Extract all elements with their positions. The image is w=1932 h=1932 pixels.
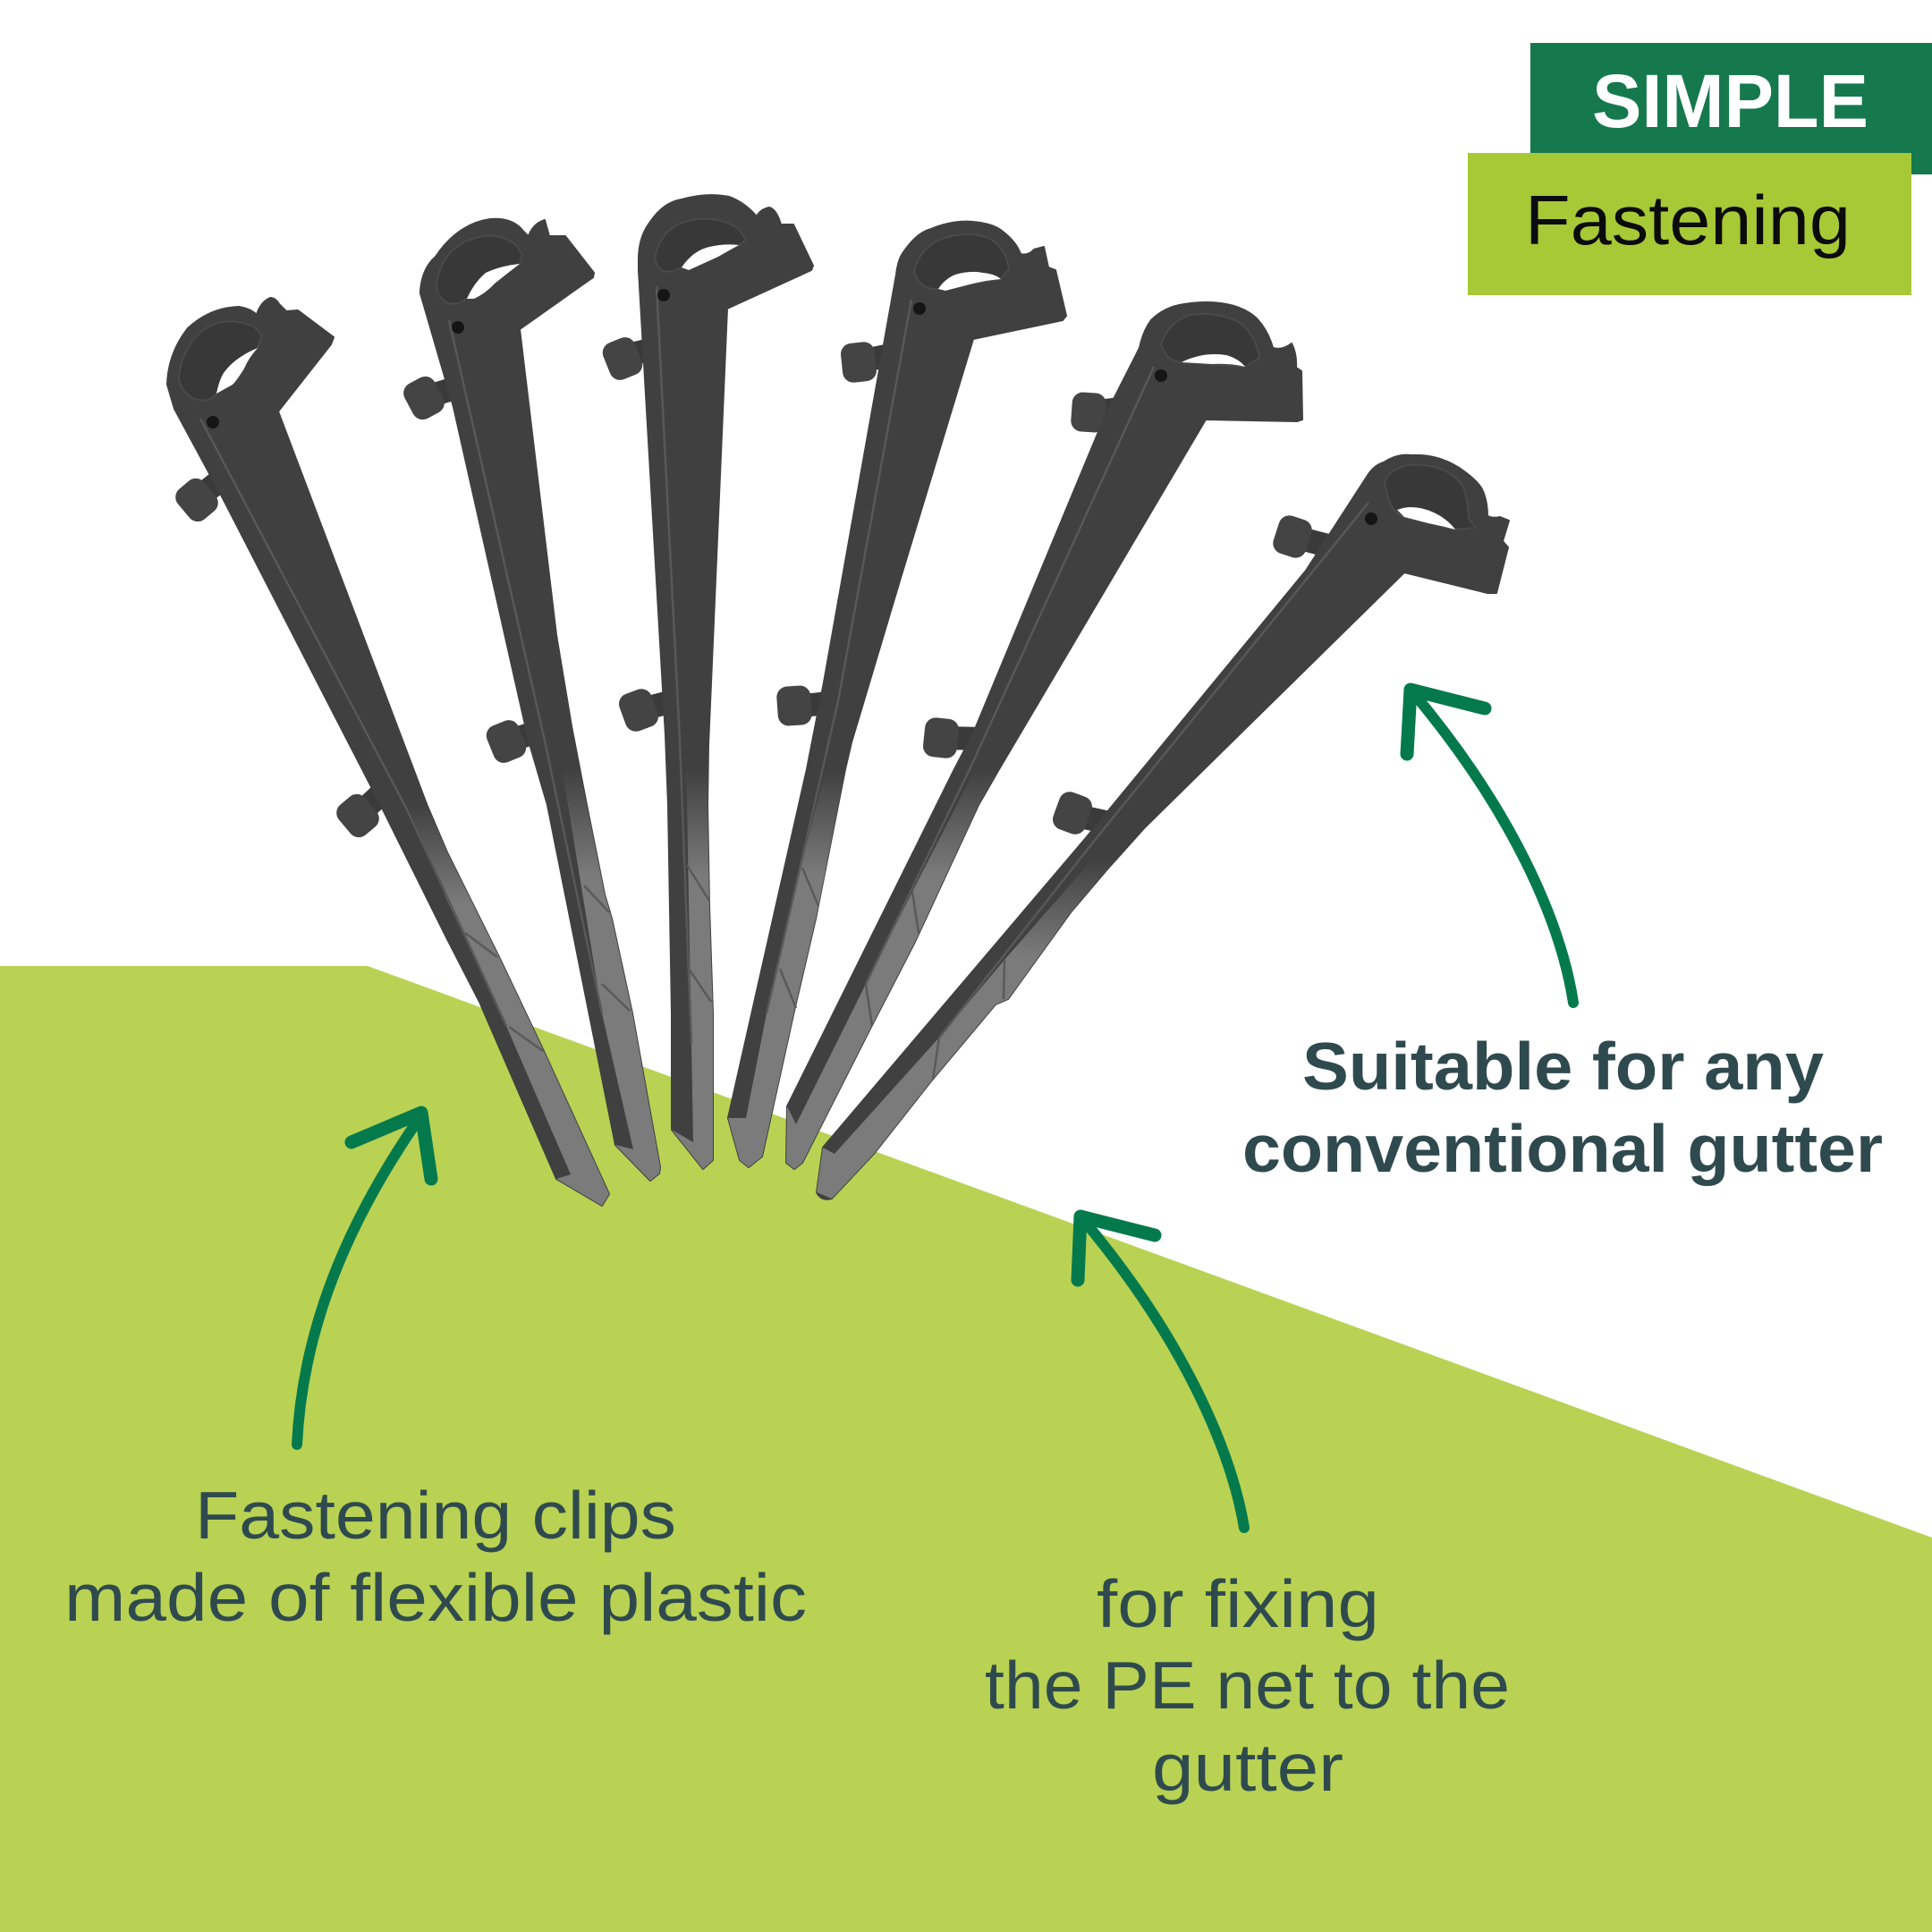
text: for fixing the PE net to the gutter: gutter — [1152, 1730, 1343, 1805]
badge: SIMPLE Fastening — [1468, 43, 1932, 295]
text: suitable for any conventional gutter: conventional gutter — [1242, 1111, 1883, 1186]
badge: SIMPLE dark green bar — [1530, 43, 1932, 174]
product: fastening clip 5 — [786, 302, 1302, 1169]
badge: Fastening light green bar — [1468, 153, 1911, 295]
product: fastening clip 6 — [817, 455, 1509, 1199]
text: fastening clips made of flexible plastic — [64, 1478, 807, 1635]
text: for fixing the PE net to the gutter: the PE net to the — [985, 1648, 1510, 1723]
product: fastening clip 1 — [167, 298, 609, 1206]
arrow: to PE net — [1078, 1216, 1244, 1528]
product: fastening clip 3 — [599, 195, 813, 1169]
product: fastening clip 2 — [400, 219, 660, 1181]
arrow: to fastening clips — [297, 1113, 431, 1445]
product: fastening clip 4 — [728, 222, 1066, 1167]
background: green diagonal panel — [0, 966, 1932, 1932]
heading: SIMPLE: SIMPLE — [1592, 59, 1868, 143]
text: fastening clips made of flexible plastic: made of flexible plastic — [64, 1560, 807, 1635]
arrow: to gutter — [1407, 690, 1573, 1003]
text: for fixing the PE net to the gutter: for fixing — [1097, 1566, 1379, 1641]
text: suitable for any conventional gutter: Suitable for any — [1302, 1029, 1824, 1104]
text: for fixing the PE net to the gutter — [985, 1566, 1510, 1805]
text: fastening clips made of flexible plastic: Fastening clips — [195, 1478, 676, 1553]
heading: Fastening: Fastening — [1525, 181, 1851, 259]
text: suitable for any conventional gutter — [1242, 1029, 1883, 1186]
